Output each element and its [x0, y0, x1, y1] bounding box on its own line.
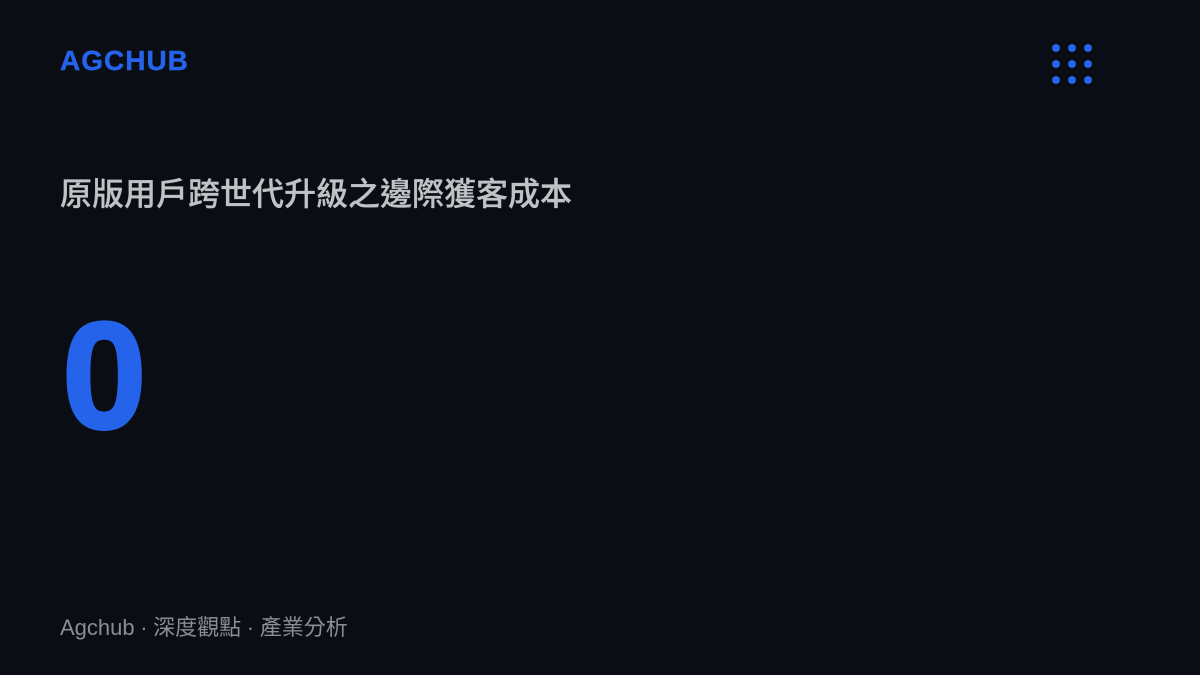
logo: AGCHUB: AGCHUB: [60, 45, 189, 76]
title: 原版用戶跨世代升級之邊際獲客成本: [60, 176, 572, 212]
footer text: Agchub · 深度觀點 · 產業分析: [60, 615, 348, 640]
icon: dot grid: [1052, 44, 1092, 84]
big number: 0: [62, 291, 147, 461]
